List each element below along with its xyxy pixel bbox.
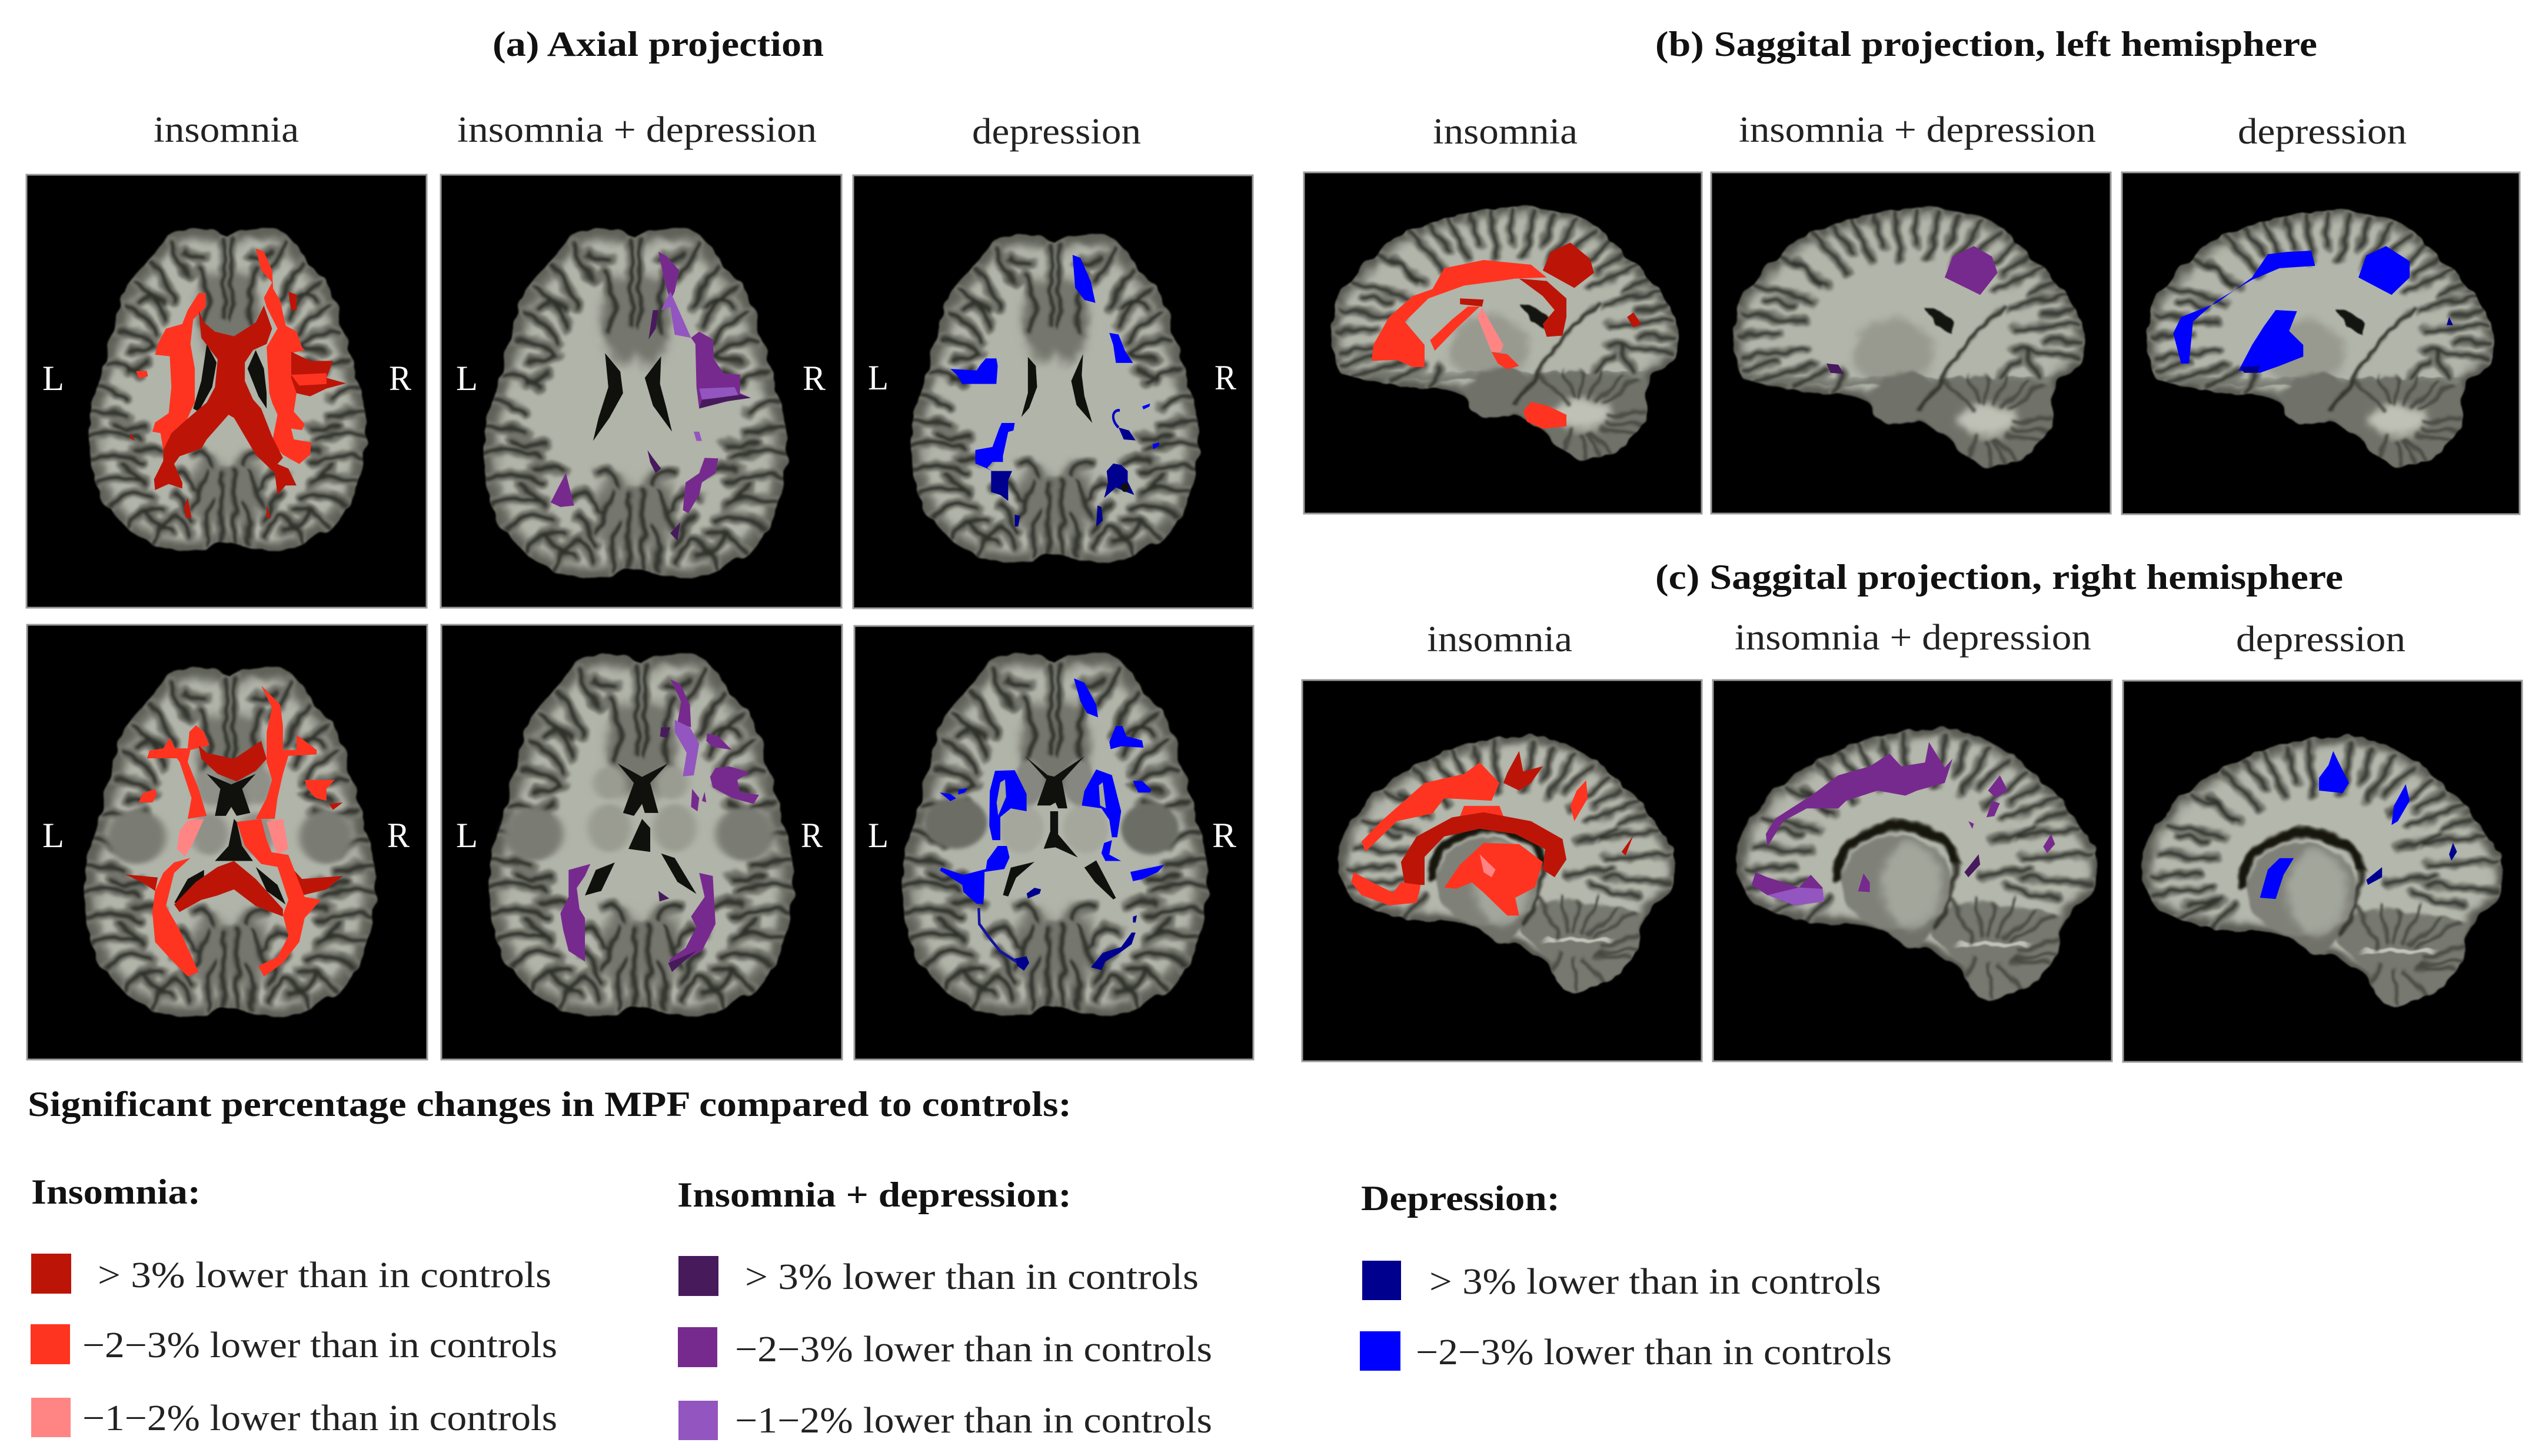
heading: axial projection: (a) Axial projection — [493, 25, 824, 64]
legend: depression: −2−3% lower than in controls — [1416, 1332, 1892, 1372]
insomnia + depression lesion overlay — [1752, 742, 2055, 905]
insomnia + depression lesion overlay — [560, 679, 759, 972]
column labels: axial: insomnia + depression — [457, 110, 817, 150]
heading: sagittal left: (b) Saggital projection, left hemisphere — [1655, 25, 2317, 64]
brain slice — [2147, 209, 2494, 467]
brain slice — [484, 229, 787, 579]
legend: insomnia: −1−2% lower than in controls — [82, 1398, 557, 1438]
legend: insomnia: Insomnia: — [31, 1172, 201, 1211]
brain slice — [1738, 728, 2098, 999]
legend: insomnia + depression: Insomnia + depression: — [677, 1175, 1072, 1214]
depression lesion overlay — [2173, 246, 2453, 373]
panel: axial insomnia + depression lower — [441, 625, 842, 1059]
column labels: sagittal left — [1433, 110, 2407, 152]
deep grey structures — [503, 767, 776, 861]
ventricles — [585, 764, 697, 895]
label: right: R — [801, 816, 823, 855]
column labels: sagittal left: insomnia — [1433, 112, 1578, 152]
label: right: R — [387, 816, 410, 855]
column labels: sagittal left: insomnia + depression — [1739, 110, 2096, 150]
label: left: L — [456, 816, 478, 855]
brain slice — [1331, 205, 1678, 460]
legend heading: Significant percentage changes in MPF compared to controls: — [28, 1085, 1072, 1124]
brain slice — [490, 654, 793, 1017]
legend: depression: Depression: — [1361, 1179, 1560, 1218]
insomnia lesion overlay — [125, 685, 343, 977]
panel: sagittal right insomnia + depression — [1713, 680, 2112, 1061]
brain slice — [89, 228, 366, 552]
panel: sagittal left insomnia + depression — [1711, 172, 2111, 514]
panel: axial depression lower — [854, 626, 1253, 1059]
panel: axial insomnia + depression upper — [441, 175, 841, 608]
ventricles — [1022, 354, 1092, 423]
legend: insomnia + depression — [677, 1175, 1212, 1441]
brain slice — [2143, 735, 2504, 1006]
label: left: L — [42, 359, 64, 398]
brain slice — [1339, 735, 1676, 992]
legend: insomnia — [31, 1172, 557, 1438]
panel: axial insomnia upper — [26, 175, 427, 608]
heading: sagittal right: (c) Saggital projection, right hemisphere — [1655, 558, 2343, 597]
column labels: axial: insomnia — [154, 110, 299, 150]
ventricles — [593, 353, 672, 441]
legend: insomnia + depression: > 3% lower than in controls — [745, 1257, 1199, 1297]
label: right: R — [389, 359, 411, 398]
column labels: sagittal right: insomnia + depression — [1735, 618, 2091, 658]
depression lesion overlay — [940, 678, 1164, 971]
deep grey structures — [924, 759, 1179, 855]
column labels: sagittal right: insomnia — [1427, 619, 1572, 659]
legend: insomnia: −2−3% lower than in controls — [82, 1325, 557, 1365]
legend: depression: > 3% lower than in controls — [1429, 1262, 1881, 1302]
panel: sagittal right depression — [2123, 681, 2522, 1062]
ventricles — [174, 774, 285, 904]
panel: axial insomnia lower — [27, 625, 427, 1059]
legend: insomnia + depression: −2−3% lower than in controls — [735, 1330, 1212, 1370]
ventricles — [1003, 757, 1116, 899]
insomnia lesion overlay — [129, 249, 346, 518]
label: right: R — [1212, 816, 1236, 855]
column labels: sagittal left: depression — [2238, 112, 2407, 152]
panel: sagittal left insomnia — [1304, 172, 1702, 514]
brain slice — [85, 668, 375, 1018]
label: left: L — [456, 359, 478, 398]
legend: insomnia + depression: −1−2% lower than in controls — [735, 1401, 1212, 1441]
insomnia lesion overlay — [1372, 242, 1641, 429]
panel: sagittal right insomnia — [1302, 680, 1702, 1061]
depression lesion overlay — [950, 255, 1159, 527]
insomnia + depression lesion overlay — [551, 252, 751, 541]
brain slice — [911, 235, 1199, 564]
insomnia + depression lesion overlay — [1826, 246, 1998, 374]
label: right: R — [1215, 358, 1236, 397]
label: left: L — [42, 816, 64, 855]
column labels: axial — [154, 110, 1141, 152]
column labels: sagittal right: depression — [2236, 619, 2405, 659]
depression lesion overlay — [2260, 751, 2457, 899]
label: right: R — [803, 359, 826, 398]
ventricles — [193, 344, 267, 412]
column labels: sagittal right — [1427, 618, 2405, 659]
label: left: L — [868, 358, 889, 397]
column labels: axial: depression — [972, 112, 1141, 152]
label: left: L — [868, 816, 889, 855]
panel: axial depression upper — [853, 175, 1253, 608]
legend: depression — [1360, 1179, 1892, 1372]
insomnia lesion overlay — [1351, 751, 1633, 915]
brain slice — [903, 654, 1207, 1017]
panel: sagittal left depression — [2122, 172, 2520, 514]
deep grey structures — [106, 768, 354, 864]
legend: insomnia: > 3% lower than in controls — [98, 1255, 551, 1295]
brain slice — [1734, 206, 2085, 468]
